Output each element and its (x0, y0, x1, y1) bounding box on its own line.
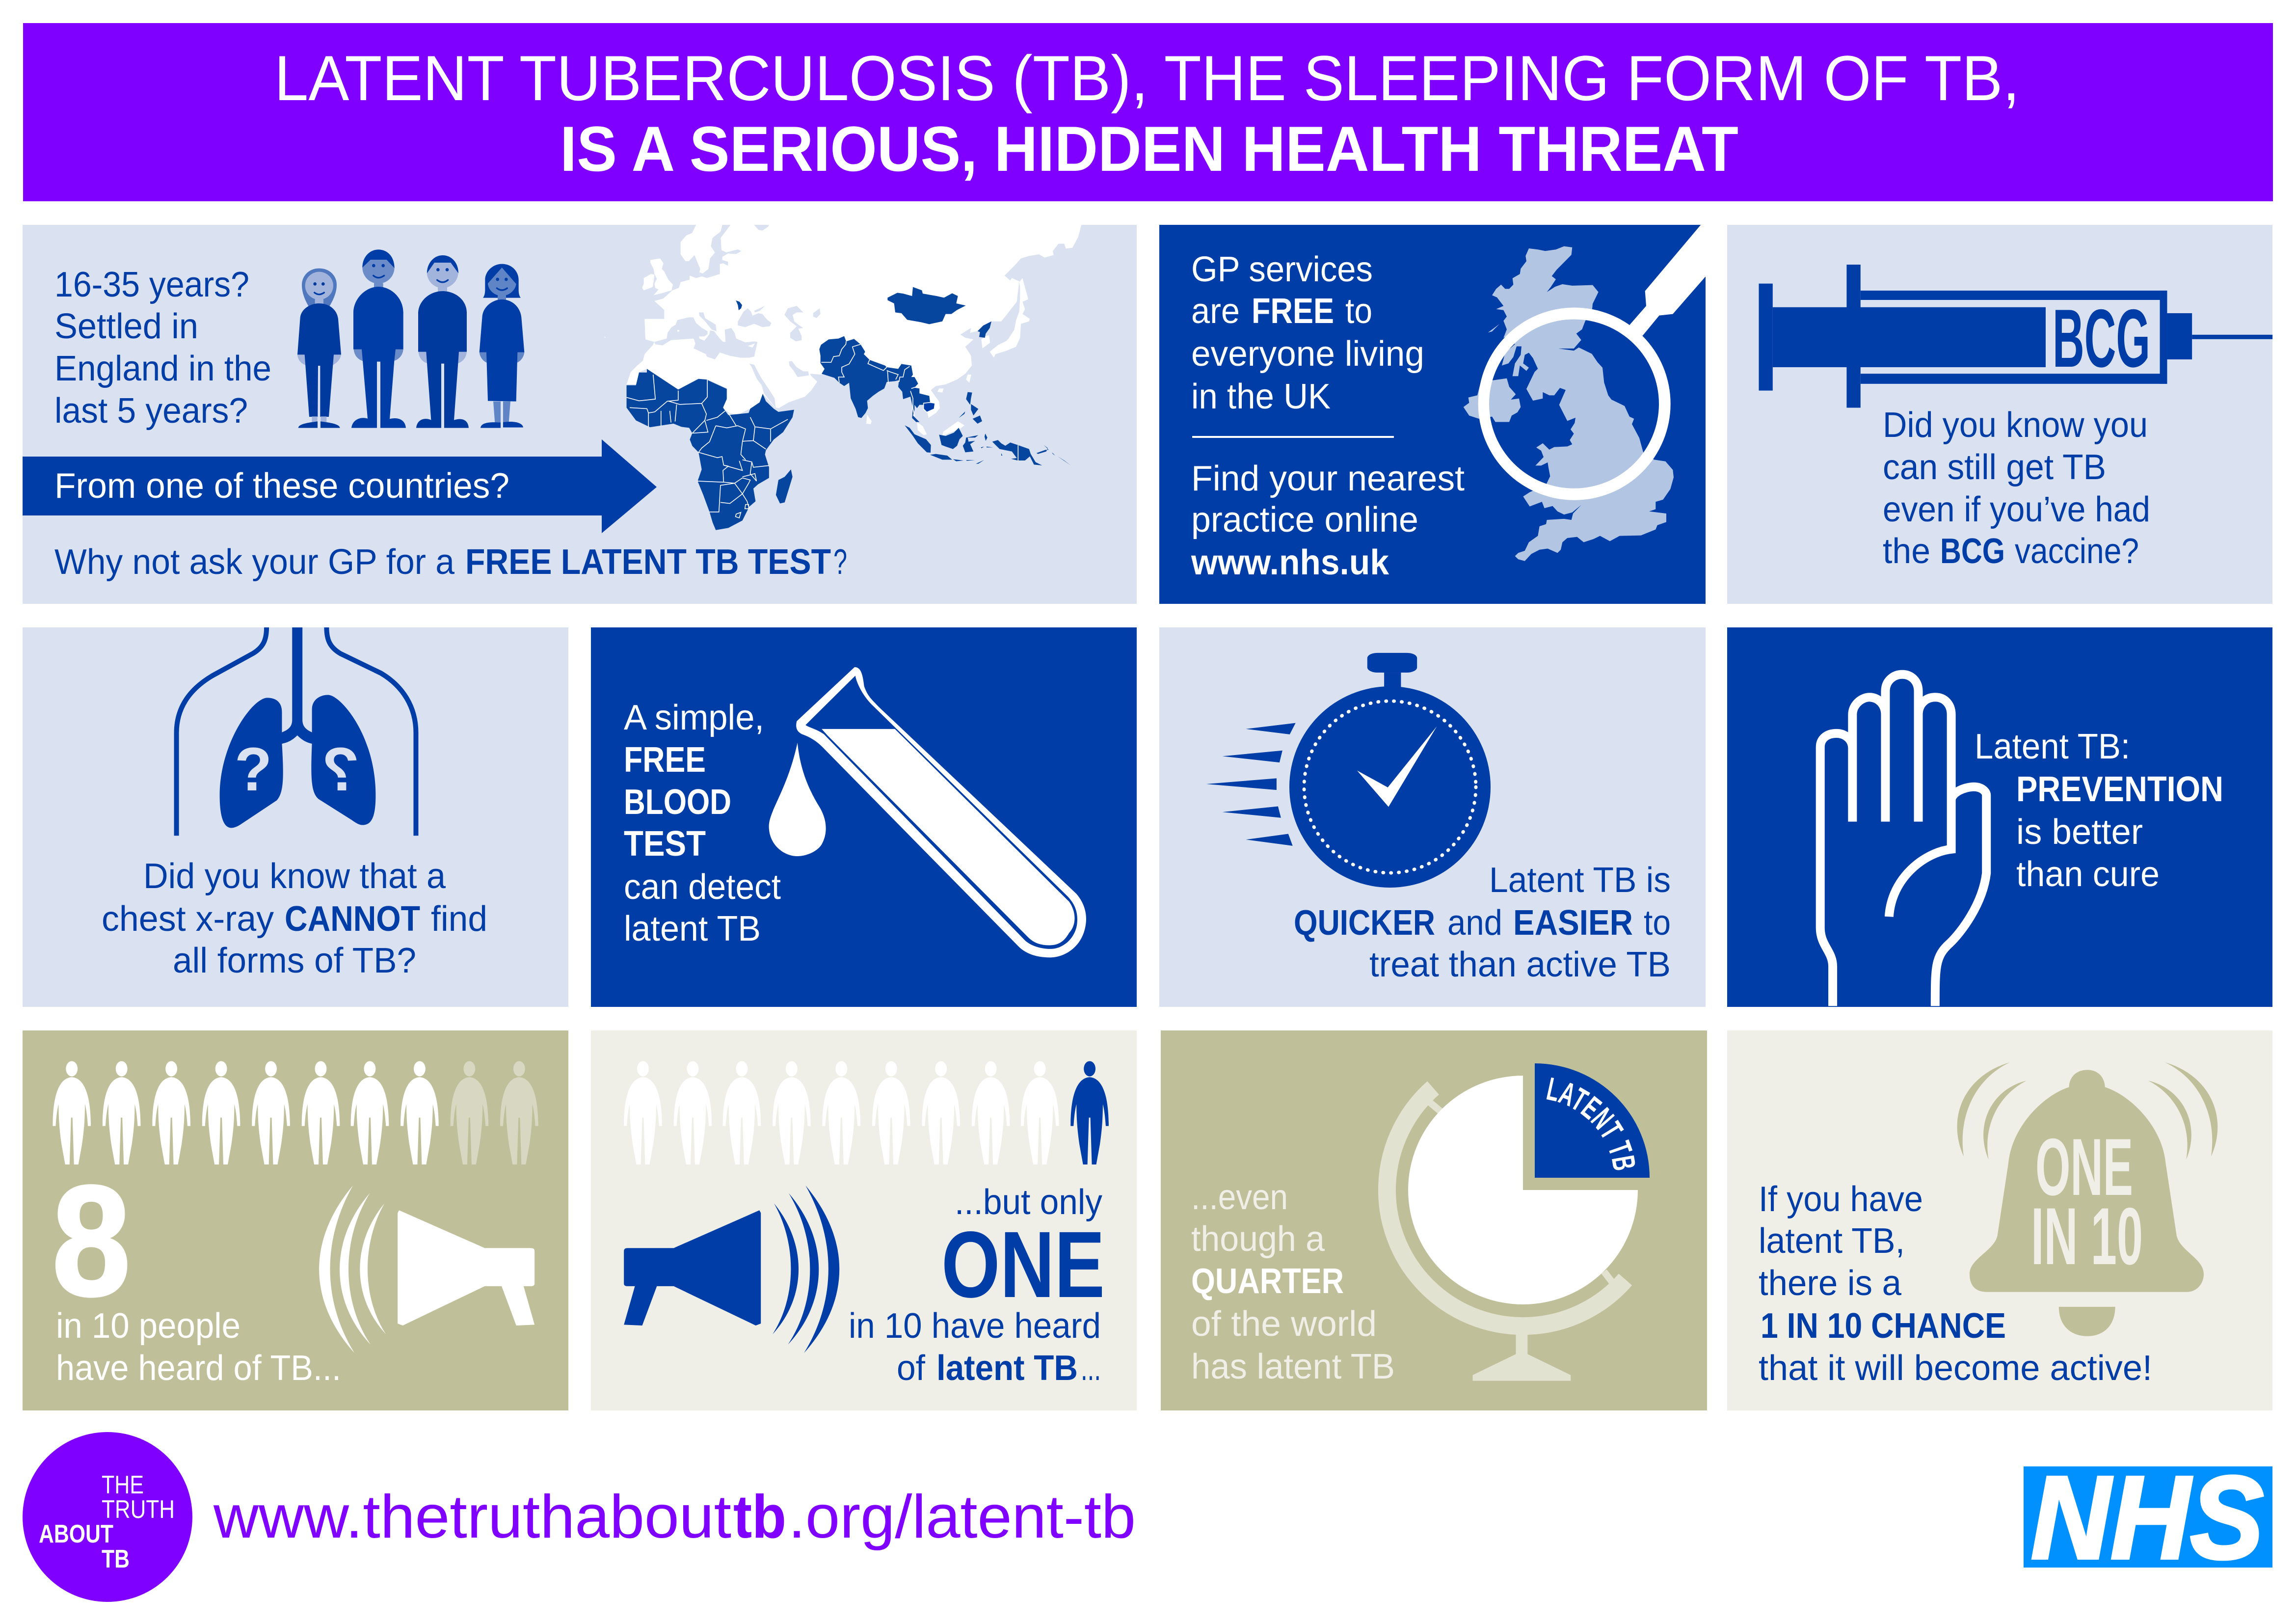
text: prevention is better than cure: is better (2016, 812, 2143, 852)
text: but only one in 10: in 10 have heard (849, 1306, 1101, 1346)
text: GP services are free: to (1345, 292, 1372, 331)
text: quicker and easier (1294, 861, 1671, 984)
text: GP services are free: www.nhs.uk (1191, 543, 1389, 582)
text: GP services are free: GP services (1191, 250, 1373, 289)
panel: one in 10 have heard of latent TB (591, 1030, 1137, 1410)
text: quarter of the world (1191, 1178, 1395, 1386)
text: age and settlement question: England in the (54, 349, 271, 388)
text: BCG question: even if you’ve had (1883, 490, 2150, 529)
text: GP services are free: practice online (1191, 500, 1418, 540)
text: x-ray question: CANNOT (285, 899, 420, 939)
text: GP services are free: FREE (1252, 292, 1334, 331)
text: quicker and easier: treat than active TB (1369, 945, 1671, 984)
text: x-ray question: Did you know that a (143, 857, 446, 896)
text: but only one in 10: ONE (941, 1212, 1105, 1317)
text: age and settlement question: Settled in (54, 307, 198, 346)
icon: four people (297, 249, 524, 428)
title banner (23, 23, 2273, 201)
panel: quicker treatment (1159, 627, 1706, 1007)
title text (274, 42, 2020, 185)
text: BCG question: Did you know you (1883, 406, 2148, 445)
text: BCG question: vaccine? (2015, 532, 2139, 571)
icon: lungs (177, 627, 416, 836)
icon: BCG syringe (1759, 265, 2272, 408)
icon: UK map under magnifying glass (1464, 225, 1706, 561)
text: prevention is better than cure: Latent TB: (1975, 727, 2130, 766)
text: quarter of the world: QUARTER (1191, 1262, 1344, 1301)
text: GP services are free: in the UK (1191, 377, 1331, 416)
panel: 1 in 10 chance (1727, 1030, 2272, 1410)
logo: The Truth About TB: THE (102, 1471, 144, 1499)
icon: globe pie chart (1378, 1063, 1650, 1381)
big number 8 and caption: in 10 people (56, 1306, 240, 1346)
text: prevention is better than cure: PREVENTION (2016, 770, 2223, 809)
text: blood test: BLOOD (624, 783, 731, 822)
text: age and settlement question: 16-35 years? (54, 265, 249, 304)
icon: ten people, eight highlighted (53, 1061, 538, 1164)
text: quarter of the world: though a (1191, 1219, 1325, 1259)
icon: alarm bell: ONE (2035, 1122, 2133, 1212)
text: quarter of the world: has latent TB (1191, 1347, 1395, 1386)
text: GP services are free: everyone living (1191, 334, 1424, 374)
icon: BCG syringe: BCG (2053, 292, 2150, 384)
text: x-ray question (102, 857, 487, 980)
panel: quarter of the world (1161, 1030, 1707, 1410)
panel: chest x-ray (23, 627, 568, 1007)
text: 1 in 10 chance: latent TB, (1759, 1221, 1905, 1261)
big number 8 and caption: 8 (52, 1153, 131, 1328)
text: quarter of the world: ...even (1191, 1178, 1288, 1217)
icon: alarm bell: IN 10 (2031, 1191, 2143, 1281)
text: blood test: FREE (624, 740, 706, 780)
icon: lungs: ? (235, 735, 272, 804)
panel: blood test (591, 627, 1137, 1007)
arrow: from one of these countries: From one of these countries? (54, 466, 509, 506)
text: 1 in 10 chance: there is a (1759, 1264, 1902, 1303)
icon: stopwatch (1206, 653, 1491, 888)
text: age and settlement question (54, 265, 271, 431)
icon: blue megaphone (624, 1186, 839, 1353)
text: GP services are free: are (1191, 292, 1240, 331)
text: but only one in 10: of (897, 1349, 926, 1388)
logo: NHS: NHS (2031, 1452, 2264, 1583)
panel: 8 in 10 have heard of TB (23, 1030, 568, 1410)
text: quicker and easier: QUICKER (1294, 903, 1435, 943)
logo: The Truth About TB: TB (102, 1545, 130, 1573)
text: x-ray question: find (431, 899, 487, 939)
text: quicker and easier: to (1644, 903, 1671, 943)
text: but only one in 10: latent TB (936, 1349, 1078, 1388)
panel: who should ask for a test (23, 225, 1137, 604)
logo: The Truth About TB: ABOUT (39, 1520, 113, 1548)
icon: test tube and drop (769, 667, 1086, 957)
text: ask your GP: FREE LATENT TB TEST (465, 542, 831, 582)
text: prevention is better than cure: than cure (2016, 855, 2160, 894)
text: ask your GP (54, 542, 847, 582)
text: prevention is better than cure (1975, 727, 2223, 894)
text: quicker and easier: Latent TB is (1489, 861, 1671, 900)
icon: white megaphone (319, 1186, 534, 1353)
website url: .org/latent-tb (788, 1483, 1136, 1551)
text: but only one in 10: ... (1081, 1349, 1101, 1388)
text: blood test: TEST (624, 824, 706, 864)
title text: LATENT TUBERCULOSIS (TB), THE SLEEPING FORM OF TB, (274, 42, 2020, 114)
title text: IS A SERIOUS, HIDDEN HEALTH THREAT (560, 113, 1738, 185)
text: x-ray question: all forms of TB? (173, 941, 416, 980)
text: x-ray question: chest x-ray (102, 899, 274, 939)
icon: alarm bell (1957, 1062, 2217, 1336)
text: ask your GP: ? (833, 542, 847, 582)
icon: globe pie chart: LATENT TB (1546, 1077, 1635, 1170)
arrow: from one of these countries (23, 439, 657, 533)
website url (213, 1483, 1136, 1551)
icon: raised hand (1820, 675, 1986, 1006)
text: 1 in 10 chance: 1 IN 10 CHANCE (1761, 1306, 2006, 1346)
big number 8 and caption: have heard of TB... (56, 1349, 341, 1388)
text: GP services are free: Find your nearest (1191, 459, 1465, 498)
map of high-incidence countries (604, 225, 1081, 530)
text: but only one in 10: ...but only (955, 1183, 1102, 1222)
text: 1 in 10 chance: If you have (1759, 1180, 1923, 1219)
text: GP services are free (1191, 250, 1465, 582)
text: BCG question: BCG (1940, 532, 2005, 571)
big number 8 and caption (52, 1153, 341, 1388)
logo: The Truth About TB (23, 1432, 192, 1602)
icon: ten people, one highlighted (624, 1061, 1109, 1164)
text: but only one in 10 (849, 1183, 1105, 1388)
website url: tb (733, 1483, 786, 1551)
text: 1 in 10 chance: that it will become active! (1759, 1349, 2152, 1388)
text: blood test: can detect (624, 867, 781, 907)
text: blood test: latent TB (624, 909, 761, 948)
panel: GP services (1159, 225, 1706, 604)
text: ask your GP: Why not ask your GP for a (54, 542, 455, 582)
text: BCG question: the (1883, 532, 1930, 571)
panel: prevention (1727, 627, 2272, 1007)
panel: BCG vaccine (1727, 225, 2272, 604)
text: quarter of the world: of the world (1191, 1304, 1377, 1344)
website url: www.thetruthabout (213, 1483, 731, 1551)
text: quicker and easier: and (1447, 903, 1502, 943)
logo: The Truth About TB: TRUTH (102, 1495, 175, 1524)
text: blood test (624, 698, 781, 948)
text: age and settlement question: last 5 years? (54, 391, 248, 431)
text: BCG question (1883, 406, 2150, 571)
icon: lungs: ? (322, 735, 359, 804)
text: blood test: A simple, (624, 698, 764, 737)
text: 1 in 10 chance (1759, 1180, 2152, 1388)
text: quicker and easier: EASIER (1513, 903, 1633, 943)
text: BCG question: can still get TB (1883, 448, 2106, 487)
